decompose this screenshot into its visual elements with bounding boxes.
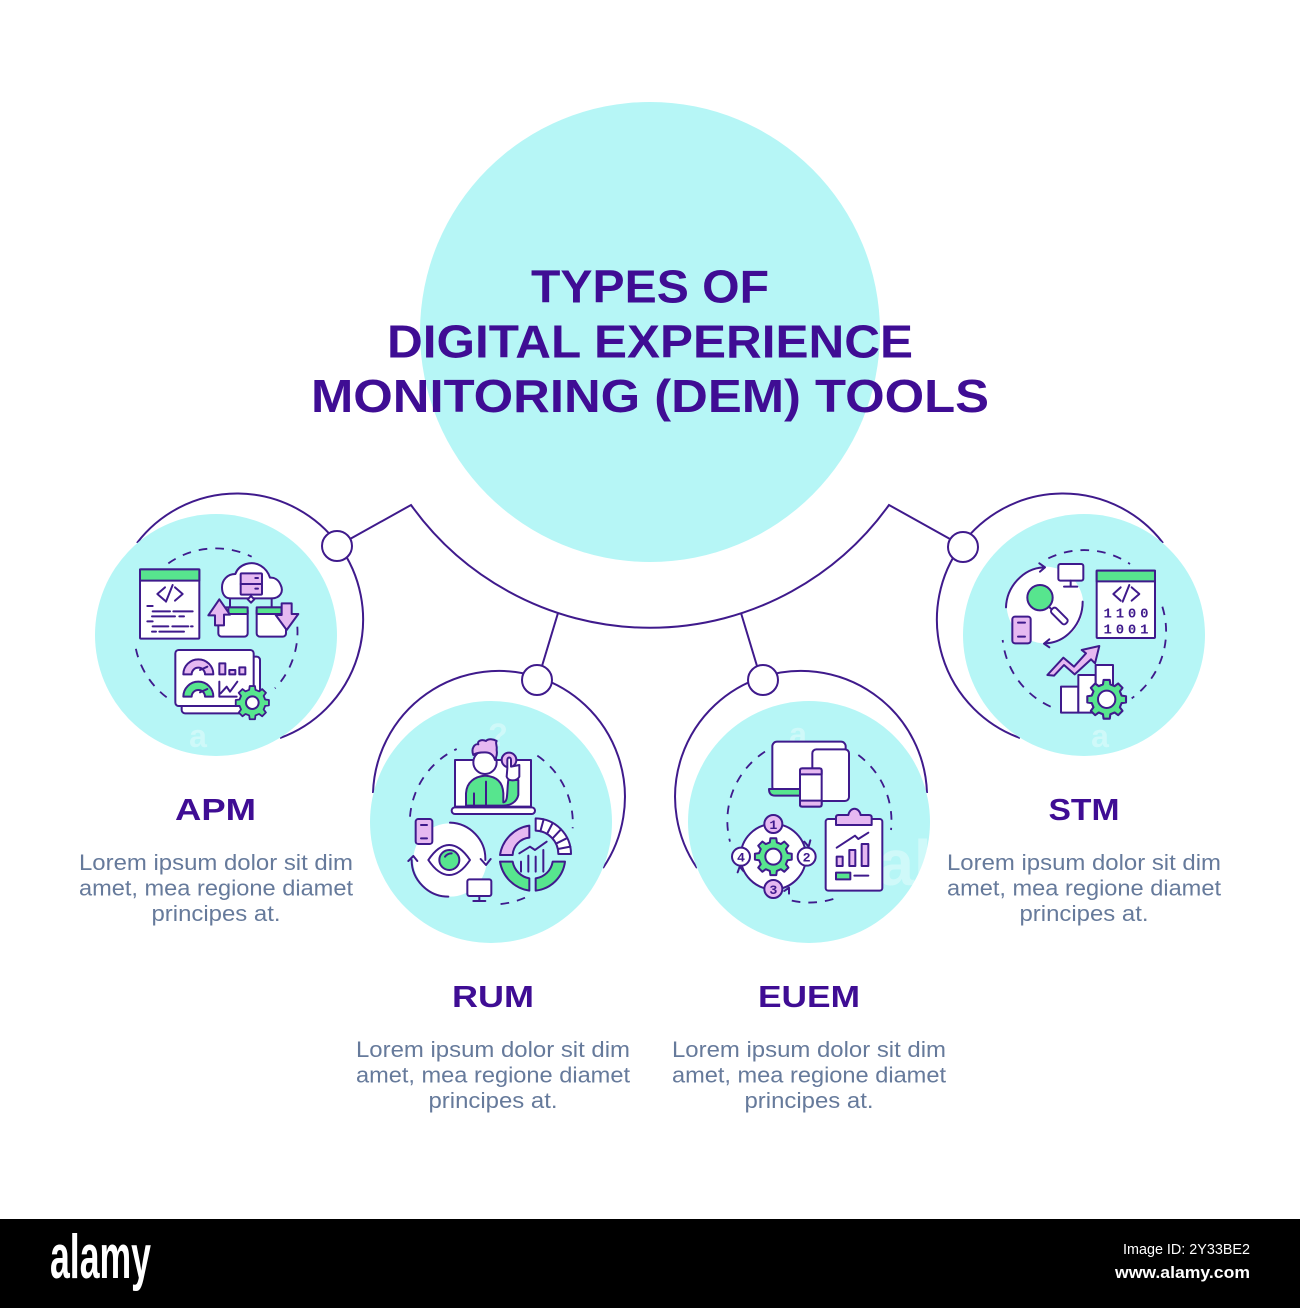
connector network (350, 505, 950, 666)
icon: STM synthetic transaction monitoring (1003, 550, 1166, 719)
icon: RUM real user monitoring (408, 739, 573, 904)
text block: RUM: RUM (452, 979, 534, 1014)
text block: APM (79, 792, 353, 926)
title: DIGITAL EXPERIENCE (387, 316, 913, 368)
panel: RUM circle (370, 665, 625, 943)
panel: RUM circle: ? (488, 717, 508, 753)
text block: STM (947, 792, 1221, 926)
panel: EUEM circle: al (878, 827, 932, 899)
text block: APM: Lorem ipsum dolor sit dim (79, 850, 353, 875)
text block: APM: principes at. (152, 901, 280, 926)
text block: STM: Lorem ipsum dolor sit dim (947, 850, 1221, 875)
icon: EUEM end user experience monitoring (727, 742, 891, 903)
footer bar: Image ID: 2Y33BE2 (1123, 1241, 1250, 1258)
panel: STM circle: a (1091, 718, 1109, 754)
text block: EUEM (672, 979, 946, 1113)
title: MONITORING (DEM) TOOLS (311, 370, 989, 422)
icon: APM application monitoring (135, 548, 298, 719)
icon: EUEM end user experience monitoring: 3 (769, 884, 777, 899)
text block: STM: amet, mea regione diamet (947, 876, 1221, 900)
footer bar: alamy (50, 1223, 151, 1292)
panel: APM circle (95, 494, 363, 756)
central circle (420, 102, 880, 562)
title: TYPES OF (531, 260, 769, 312)
title (311, 260, 989, 422)
text block: STM: principes at. (1020, 901, 1148, 926)
panel: STM circle (937, 494, 1205, 756)
icon: STM synthetic transaction monitoring: 1001 (1103, 622, 1148, 638)
panel: APM circle: a (189, 718, 207, 754)
icon: STM synthetic transaction monitoring: 1100 (1103, 606, 1148, 622)
text block: EUEM: EUEM (758, 979, 860, 1014)
text block: EUEM: amet, mea regione diamet (672, 1062, 946, 1088)
text block: APM: amet, mea regione diamet (79, 876, 353, 900)
icon: EUEM end user experience monitoring: 2 (803, 852, 811, 867)
icon: EUEM end user experience monitoring: 4 (737, 852, 745, 867)
text block: EUEM: principes at. (744, 1088, 874, 1113)
text block: EUEM: Lorem ipsum dolor sit dim (672, 1037, 946, 1062)
panel: EUEM circle (675, 665, 932, 943)
icon: EUEM end user experience monitoring: 1 (769, 819, 777, 834)
text block: APM: APM (175, 792, 256, 827)
text block: RUM: amet, mea regione diamet (356, 1062, 630, 1088)
footer bar: www.alamy.com (1114, 1263, 1250, 1282)
text block: STM: STM (1048, 792, 1120, 827)
text block: RUM: Lorem ipsum dolor sit dim (356, 1037, 630, 1062)
panel: EUEM circle: a (789, 716, 807, 752)
text block: RUM: principes at. (428, 1088, 558, 1113)
footer bar (0, 1219, 1300, 1308)
text block: RUM (356, 979, 630, 1113)
